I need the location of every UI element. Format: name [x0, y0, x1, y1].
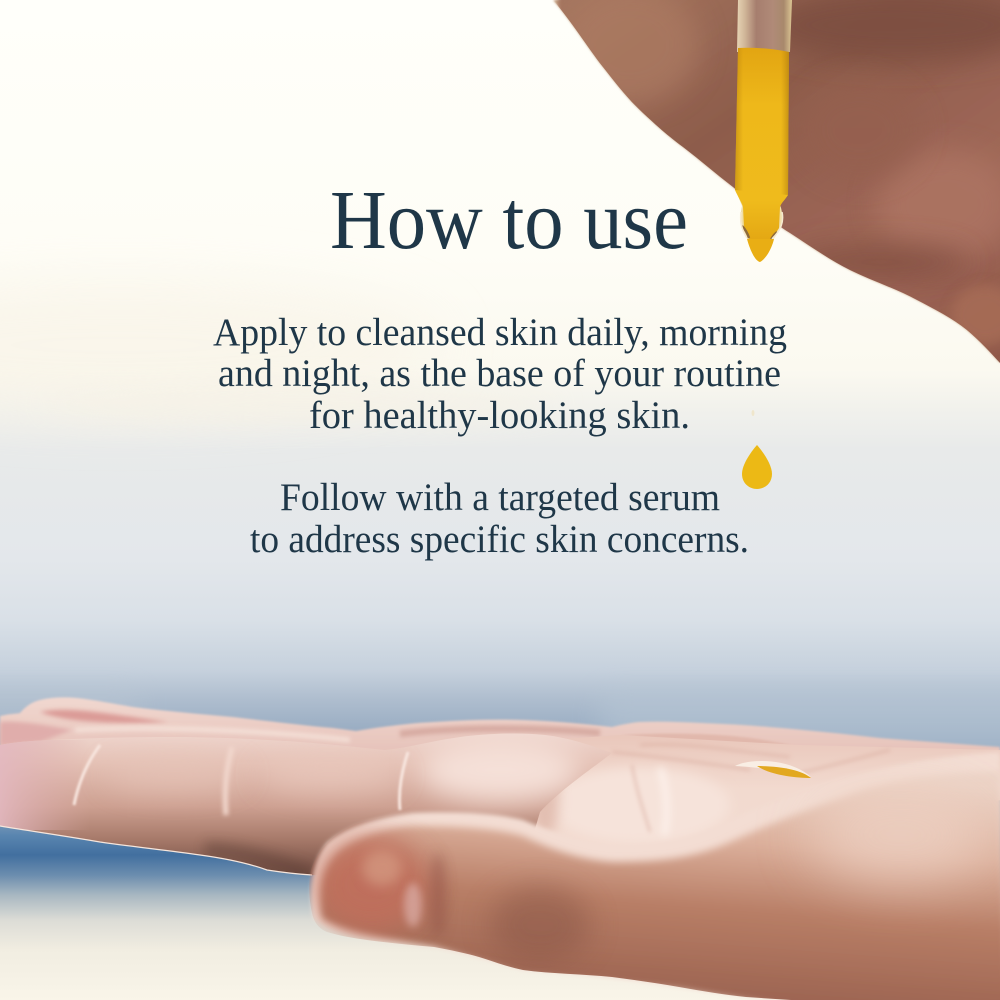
finger lower rim light [0, 826, 312, 875]
back fingers [0, 697, 1000, 800]
hanging drop [747, 239, 774, 262]
text block: application instructions: and night, as the base of your routine [218, 352, 781, 395]
lower hand [0, 697, 1000, 1000]
palm [480, 735, 1000, 870]
text block: follow-up serum [250, 476, 749, 561]
oil drop on palm [735, 761, 811, 778]
text block: follow-up serum: Follow with a targeted serum [280, 476, 720, 519]
glass tip inner reflections [741, 212, 783, 239]
upper hand holding dropper [553, 0, 1000, 380]
text block: application instructions [213, 311, 787, 437]
soft outer rim [311, 752, 1000, 1000]
text block: follow-up serum: to address specific skin concerns. [250, 518, 749, 561]
falling oil drop [742, 410, 772, 489]
glass tip [738, 196, 787, 240]
dropper glass tube [737, 0, 792, 52]
thumb body [316, 772, 1000, 1000]
text block: application instructions: for healthy-looking skin. [309, 394, 690, 437]
title: How to use [330, 174, 688, 267]
oil column [735, 48, 789, 239]
thumb and heel of hand [311, 752, 1000, 1000]
palm pad and creases [531, 744, 890, 843]
text block: application instructions: Apply to cleansed skin daily, morning [213, 311, 787, 354]
dropper pipette with oil [735, 0, 792, 262]
front index finger [0, 733, 640, 880]
